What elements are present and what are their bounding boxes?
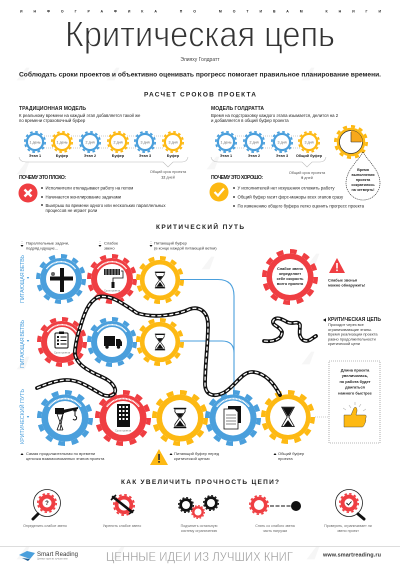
footer rule <box>0 546 400 548</box>
title: Критическая цепь <box>65 14 335 54</box>
annotations above the gears: Параллельные задачи, <box>26 240 69 246</box>
lead sentence: Соблюдать сроки проектов и объективно оценивать прогресс помогает правильное планирование времени. <box>19 72 381 78</box>
annotations above the gears: Слабое <box>104 240 119 246</box>
bracket: Goldratt <box>211 157 326 167</box>
description: Goldratt model: и добавляется в общий буфер проекта <box>211 118 289 123</box>
bullet list: why good: У исполнителей нет искушения отложить работу <box>238 186 335 190</box>
step: identify weak link: Определить слабое звено <box>23 524 67 528</box>
gear: documents <box>207 392 259 444</box>
blue buffer lines <box>178 280 234 395</box>
step: strengthen weak link: Укрепить слабое звено <box>103 524 141 528</box>
step: identify weak link <box>23 490 67 528</box>
total: traditional: 12 дней <box>161 176 175 180</box>
icon: clock gear <box>335 126 367 158</box>
gear: building <box>97 392 149 444</box>
vertical labels: branches: КРИТИЧЕСКИЙ ПУТЬ <box>18 389 26 444</box>
stage labels: traditional: Этап 1 <box>29 154 41 158</box>
stage labels: traditional: Буфер <box>112 154 125 158</box>
text: critical chain definition: Проходит через все <box>328 322 364 327</box>
step: strengthen weak link <box>103 495 141 528</box>
step: subordinate the system: Подчинить остальную <box>181 524 218 528</box>
text: critical chain definition <box>323 317 381 346</box>
gear: weak link, paint roller <box>89 256 135 302</box>
website: www.smartreading.ru <box>322 552 381 558</box>
annotations above the gears: звено <box>104 246 115 250</box>
stage labels: traditional: Буфер <box>167 154 180 158</box>
section heading: critical path: КРИТИЧЕСКИЙ ПУТЬ <box>156 222 244 231</box>
callout: project longer but faster: намного быстрее <box>338 390 373 395</box>
stage gears: Goldratt: 2 дня <box>249 140 259 144</box>
heading: why bad: ПОЧЕМУ ЭТО ПЛОХО: <box>19 175 66 181</box>
callout: time reduced: проекта <box>356 178 371 182</box>
callout: project longer but faster: Длина проекта <box>341 368 370 372</box>
callout: weak links gear <box>264 251 316 303</box>
vertical labels: branches <box>18 255 29 444</box>
step: offload weak link: Снять со слабого звена <box>255 524 295 528</box>
annotations above the gears: Питающий буфер <box>154 240 188 246</box>
stage labels: Goldratt: Этап 1 <box>220 154 232 158</box>
bullet list: why good: По изменению общего буфера легко оценить прогресс проекта <box>238 204 365 208</box>
stage gears: Goldratt <box>216 132 319 152</box>
step: offload weak link: часть нагрузки <box>263 529 287 533</box>
step: identify weak link: ? <box>45 501 49 507</box>
slogan: ЦЕННЫЕ ИДЕИ ИЗ ЛУЧШИХ КНИГ <box>106 549 293 564</box>
step: verify: Проверить, ограничивает ли <box>324 524 372 528</box>
gear: truck <box>89 319 135 365</box>
note: longest chain: Самая продолжительная по времени <box>26 451 95 456</box>
supertitle: ИНФОГРАФИКА ПО МОТИВАМ КНИГИ <box>20 10 381 14</box>
logo: Ценные идеи из лучших книг <box>37 558 68 560</box>
icon: thumbs up <box>343 402 366 427</box>
gear: project buffer <box>263 392 313 442</box>
note: longest chain: цепочка взаимосвязанных этапов проекта <box>26 456 105 461</box>
bullet list: why bad: Исполнители откладывают работу на потом <box>46 186 133 190</box>
callout: weak links gear: всего проекта <box>277 282 304 286</box>
icon: warning <box>150 449 168 465</box>
annotations above the gears: подряд идущие... <box>26 246 58 250</box>
bracket: traditional <box>19 157 188 167</box>
text: critical chain definition: критической цепи <box>328 341 360 346</box>
icon: chain squiggle <box>264 318 316 341</box>
connector to the project box <box>315 416 329 418</box>
gear: parallel tasks <box>38 256 84 302</box>
critical chain path <box>37 296 280 396</box>
gear: checklist: Срок проекта <box>54 350 71 354</box>
step: subordinate the system <box>179 496 218 533</box>
stage labels: traditional: Этап 2 <box>84 154 96 158</box>
stage gears: Goldratt: 3 дня <box>277 140 287 144</box>
bullet list: why good: Общий буфер гасит форс-мажоры всех этапов сразу <box>238 194 344 200</box>
text: critical chain definition: равно продолжительности <box>328 336 376 341</box>
gear: checklist <box>39 319 85 365</box>
note: feeding buffer before chain <box>170 451 220 461</box>
bullet list: why good <box>233 186 365 208</box>
total: traditional: Общий срок проекта <box>150 170 187 174</box>
stage gears: traditional: 1 день <box>57 140 68 144</box>
vertical labels: branches: ПИТАЮЩАЯ ВЕТВЬ <box>20 320 26 368</box>
callout: project longer but faster: двигаться <box>345 385 365 390</box>
stage gears: traditional: 3 дня <box>168 140 178 144</box>
connectors between stages <box>235 136 300 148</box>
text: critical chain definition: ограничивающие этапы. <box>328 327 372 332</box>
icon: yellow check <box>210 182 228 202</box>
connectors between stages <box>44 136 164 148</box>
stage gears: traditional: 2 дня <box>85 140 95 144</box>
stage gears: Goldratt: 3 дня <box>304 140 314 144</box>
callout: time reduced: Время <box>357 168 369 172</box>
step: verify <box>324 490 372 533</box>
logo <box>19 551 78 561</box>
stage labels: traditional <box>29 154 180 158</box>
vertical labels: branches: ПИТАЮЩАЯ ВЕТВЬ <box>20 255 26 303</box>
gear: feeding buffer before critical chain <box>154 392 206 444</box>
stage gears: traditional: 3 дня <box>140 140 150 144</box>
note: project buffer: проекта <box>278 456 293 461</box>
note: project buffer <box>274 451 305 461</box>
callout: weak links gear: определяет <box>279 272 301 276</box>
stage labels: traditional: Этап 3 <box>139 154 151 158</box>
gear: crane <box>39 392 91 444</box>
callout: find weak links: Слабые звенья <box>328 278 357 282</box>
callout: project longer but faster: увеличилась, <box>342 373 368 378</box>
section heading: project timing: РАСЧЕТ СРОКОВ ПРОЕКТА <box>144 92 256 98</box>
callout: find weak links <box>328 258 365 288</box>
description: traditional model: по времени страховочный буфер <box>19 118 86 123</box>
panel: why good <box>210 175 365 208</box>
step: subordinate the system: систему ограничению <box>181 529 217 533</box>
callout: weak links gear: себе скорость <box>277 277 304 281</box>
total: Goldratt: Общий срок проекта <box>289 171 326 175</box>
note: longest chain <box>20 451 105 461</box>
text: critical chain definition: КРИТИЧЕСКАЯ ЦЕПЬ <box>328 317 381 323</box>
gear: building: Срок проекта <box>115 428 132 432</box>
description: Goldratt model: Время на подстраховку каждого этапа изымается, делится на 2 <box>211 113 339 118</box>
callout: time reduced: на четверть! <box>351 188 375 192</box>
bullet list: why bad: Начинается жонглирование задачами <box>46 194 122 200</box>
gear: weak link, paint roller: Срок проекта <box>104 288 121 292</box>
callout: find weak links: можно обнаружить! <box>328 284 365 288</box>
description: traditional model: К реальному времени на каждый этап добавляется такой же <box>19 113 141 118</box>
panel: why bad <box>18 175 166 213</box>
total: Goldratt: 9 дней <box>301 176 313 180</box>
panel: traditional model <box>19 106 188 180</box>
callout: project longer but faster: но работа будет <box>339 379 371 384</box>
icon: red cross <box>18 184 38 202</box>
note: feeding buffer before chain: критической цепью <box>174 456 210 461</box>
stage gears: traditional: 1 день <box>30 140 41 144</box>
stage gears: traditional <box>25 132 183 152</box>
bullet list: why bad: процессов не играет роли <box>46 208 98 213</box>
note: feeding buffer before chain: Питающий буфер перед <box>174 451 220 456</box>
callout: time reduced: выполнения <box>351 173 375 177</box>
callout: weak links gear: Слабое звено <box>277 267 304 271</box>
gear: feeding buffer 1 <box>138 258 182 302</box>
annotations above the gears <box>20 240 217 250</box>
stage labels: Goldratt: Этап 2 <box>248 154 260 158</box>
author: Элияху Голдратт <box>180 57 220 63</box>
heading: Goldratt model: МОДЕЛЬ ГОЛДРАТТА <box>211 106 264 112</box>
logo: Smart Reading <box>37 552 78 558</box>
step: verify: звено проект <box>337 529 359 533</box>
callout: time reduced <box>346 152 380 200</box>
stage labels: Goldratt <box>220 154 323 158</box>
panel: model Goldratt <box>211 106 380 200</box>
bullet list: why bad <box>41 186 166 213</box>
stage labels: Goldratt: Общий буфер <box>296 154 323 158</box>
heading: why good: ПОЧЕМУ ЭТО ХОРОШО: <box>211 175 263 181</box>
step: offload weak link <box>250 496 301 533</box>
gear chart: critical chain network <box>38 256 313 444</box>
text: critical chain definition: Время реализации проекта <box>328 332 378 337</box>
stage gears: Goldratt: 1 день <box>221 140 232 144</box>
section heading: how to strengthen: КАК УВЕЛИЧИТЬ ПРОЧНОСТЬ ЦЕПИ? <box>121 479 279 486</box>
annotations above the gears: (в конце каждой питающей ветки) <box>154 246 217 250</box>
bullet list: why bad: Выигрыш во времени одного или нескольких параллельных <box>46 203 166 208</box>
callout: time reduced: сократилось <box>351 183 375 187</box>
callout: project longer but faster <box>329 361 380 443</box>
stage gears: traditional: 2 дня <box>113 140 123 144</box>
stage labels: Goldratt: Этап 3 <box>276 154 288 158</box>
stage labels: traditional: Буфер <box>56 154 69 158</box>
heading: traditional model: ТРАДИЦИОННАЯ МОДЕЛЬ <box>19 106 86 112</box>
note: project buffer: Общий буфер <box>278 451 305 456</box>
gear: feeding buffer 2 <box>138 320 182 364</box>
